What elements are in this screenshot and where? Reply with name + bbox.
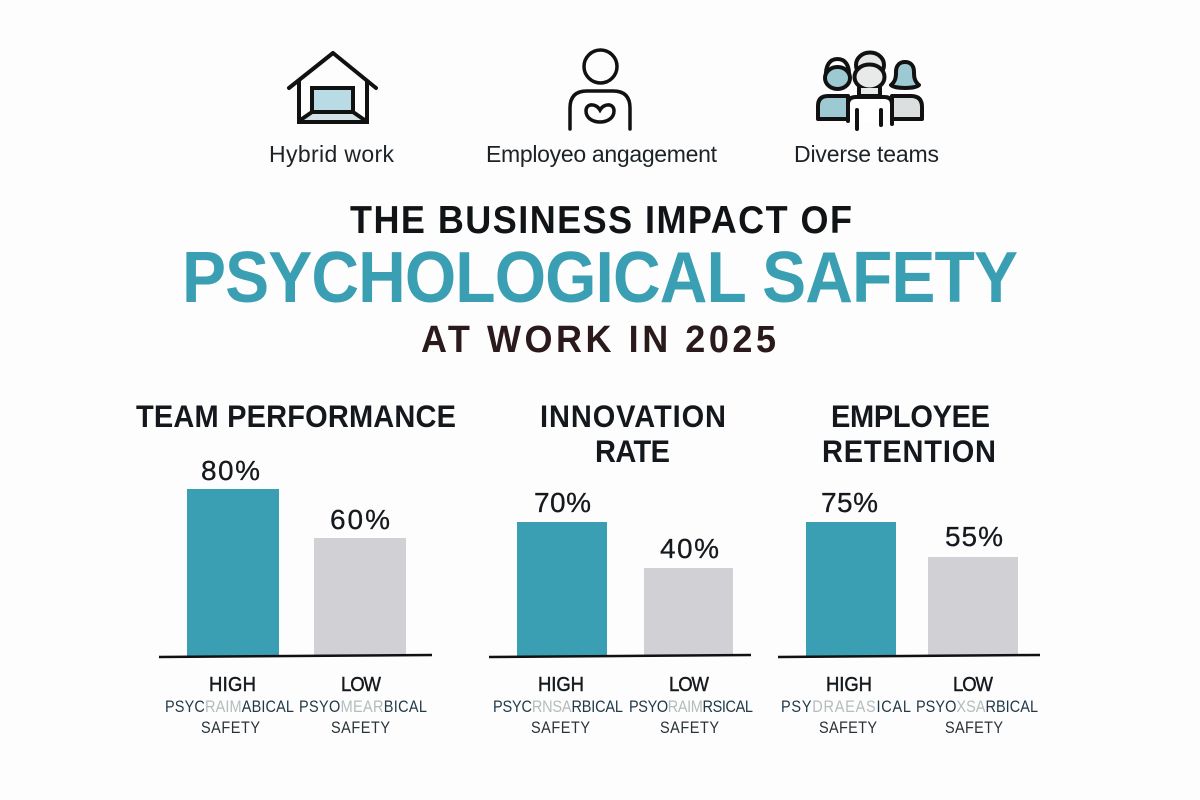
panel: team performance chart [136, 400, 456, 737]
title line 1: THE BUSINESS IMPACT OF [350, 198, 852, 241]
heading: innovation rate: INNOVATION [540, 400, 726, 434]
panel: employee retention chart [778, 400, 1040, 737]
label: high psychological safety: PSYCRNSARBICAL [493, 698, 623, 716]
panel: innovation rate chart [489, 400, 753, 737]
label: low psychological safety [916, 673, 1038, 737]
heading: employee retention [822, 400, 996, 469]
label: low psychological safety: SAFETY [331, 719, 391, 737]
label: low psychological safety [629, 673, 753, 737]
axis [489, 655, 751, 657]
heading: innovation rate [540, 400, 726, 469]
heading: innovation rate: RATE [595, 435, 670, 469]
heading: employee retention: RETENTION [822, 435, 996, 469]
label: high psychological safety: HIGH [538, 673, 584, 696]
panel: diverse teams [794, 52, 939, 167]
label: high psychological safety [165, 673, 294, 737]
label: low psychological safety: LOW [341, 673, 381, 696]
bar: low 60% [314, 538, 406, 655]
bar: high 70% [517, 522, 607, 657]
label: low psychological safety: PSYOMEARBICAL [299, 698, 427, 716]
label: high psychological safety: HIGH [209, 673, 256, 696]
label: high psychological safety: HIGH [826, 673, 872, 696]
panel: hybrid work [269, 53, 394, 167]
label: high psychological safety [493, 673, 623, 737]
axis [778, 655, 1040, 657]
label: employee engagement: Employeo angagement [486, 141, 718, 167]
icon: house with laptop [289, 53, 376, 122]
title line 3: AT WORK IN 2025 [421, 317, 776, 360]
label: low psychological safety: PSYOXSARBICAL [916, 698, 1038, 716]
label: high psychological safety [781, 673, 911, 737]
panel: employee engagement [486, 50, 718, 167]
label: high psychological safety: SAFETY [819, 719, 878, 737]
label: low psychological safety: LOW [953, 673, 993, 696]
label: high psychological safety: PSYDRAEASICAL [781, 698, 911, 716]
label: hybrid work: Hybrid work [269, 141, 394, 167]
title [182, 198, 1018, 360]
title line 2: highlight: PSYCHOLOGICAL SAFETY [182, 237, 1018, 318]
axis [159, 655, 432, 657]
label: high psychological safety: SAFETY [531, 719, 591, 737]
value: 55%: 55% [945, 521, 1003, 552]
bar: high 80% [187, 489, 279, 657]
label: low psychological safety: SAFETY [660, 719, 720, 737]
label: low psychological safety: PSYORAIMRSICAL [629, 698, 753, 716]
label: high psychological safety: PSYCRAIMABICAL [165, 698, 294, 716]
heading: team performance: TEAM PERFORMANCE [136, 400, 456, 434]
label: low psychological safety [299, 673, 427, 737]
value: 75%: 75% [821, 487, 878, 518]
bar: low 40% [644, 568, 733, 655]
icon: person with heart [570, 50, 630, 129]
value: 80%: 80% [201, 455, 260, 486]
bar: high 75% [806, 522, 896, 657]
value: 40%: 40% [660, 533, 719, 564]
value: 70%: 70% [534, 487, 591, 518]
label: diverse teams: Diverse teams [794, 141, 939, 167]
value: 60%: 60% [330, 504, 390, 535]
label: low psychological safety: SAFETY [945, 719, 1004, 737]
heading: employee retention: EMPLOYEE [831, 400, 990, 434]
label: low psychological safety: LOW [669, 673, 709, 696]
bar: low 55% [928, 557, 1018, 655]
icon: group of three people [818, 52, 922, 129]
label: high psychological safety: SAFETY [201, 719, 261, 737]
